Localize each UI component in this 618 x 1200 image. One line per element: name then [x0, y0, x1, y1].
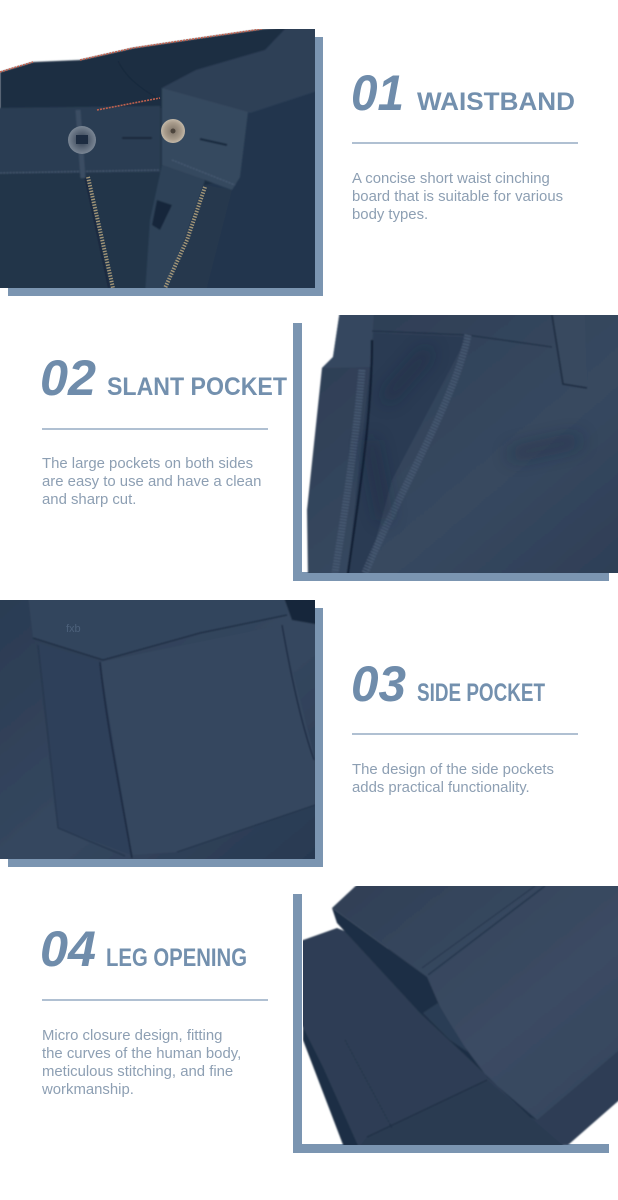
- description text: and sharp cut.: [42, 492, 136, 508]
- panel: slant pocket text: [40, 350, 287, 508]
- panel: slant pocket photo: [293, 310, 618, 581]
- heading number 03: 03: [351, 656, 406, 712]
- heading: leg opening: LEG OPENING: [106, 944, 247, 972]
- heading: waistband: WAISTBAND: [417, 88, 575, 116]
- description text: body types.: [352, 207, 428, 223]
- panel: waistband text: [351, 65, 578, 223]
- panel: leg opening text: [40, 921, 268, 1098]
- icon: embossed flap logo: fxb: [66, 623, 81, 635]
- heading number 04: 04: [40, 921, 96, 977]
- description text: meticulous stitching, and fine: [42, 1064, 233, 1080]
- heading: side pocket: SIDE POCKET: [417, 679, 545, 707]
- panel: waistband photo: [0, 25, 323, 296]
- icon: red waist stitching: [0, 29, 262, 110]
- description text: workmanship.: [41, 1082, 134, 1098]
- heading number 01: 01: [351, 65, 404, 121]
- panel: leg opening photo: [293, 880, 618, 1153]
- panel: side pocket photo: [0, 595, 323, 867]
- description text: The large pockets on both sides: [42, 456, 253, 472]
- fold shadows: [385, 439, 575, 509]
- description text: are easy to use and have a clean: [42, 474, 261, 490]
- panel: side pocket text: [351, 656, 578, 796]
- description text: the curves of the human body,: [42, 1046, 241, 1062]
- heading number 02: 02: [40, 350, 96, 406]
- description text: Micro closure design, fitting: [42, 1028, 222, 1044]
- heading: slant pocket: SLANT POCKET: [107, 373, 287, 401]
- description text: The design of the side pockets: [352, 762, 554, 778]
- icon: right zipper: [165, 187, 205, 288]
- icon: right button: [161, 119, 185, 143]
- description text: board that is suitable for various: [352, 189, 563, 205]
- description text: A concise short waist cinching: [352, 171, 550, 187]
- description text: adds practical functionality.: [352, 780, 530, 796]
- icon: left button: [68, 126, 96, 154]
- icon: left zipper: [88, 177, 113, 288]
